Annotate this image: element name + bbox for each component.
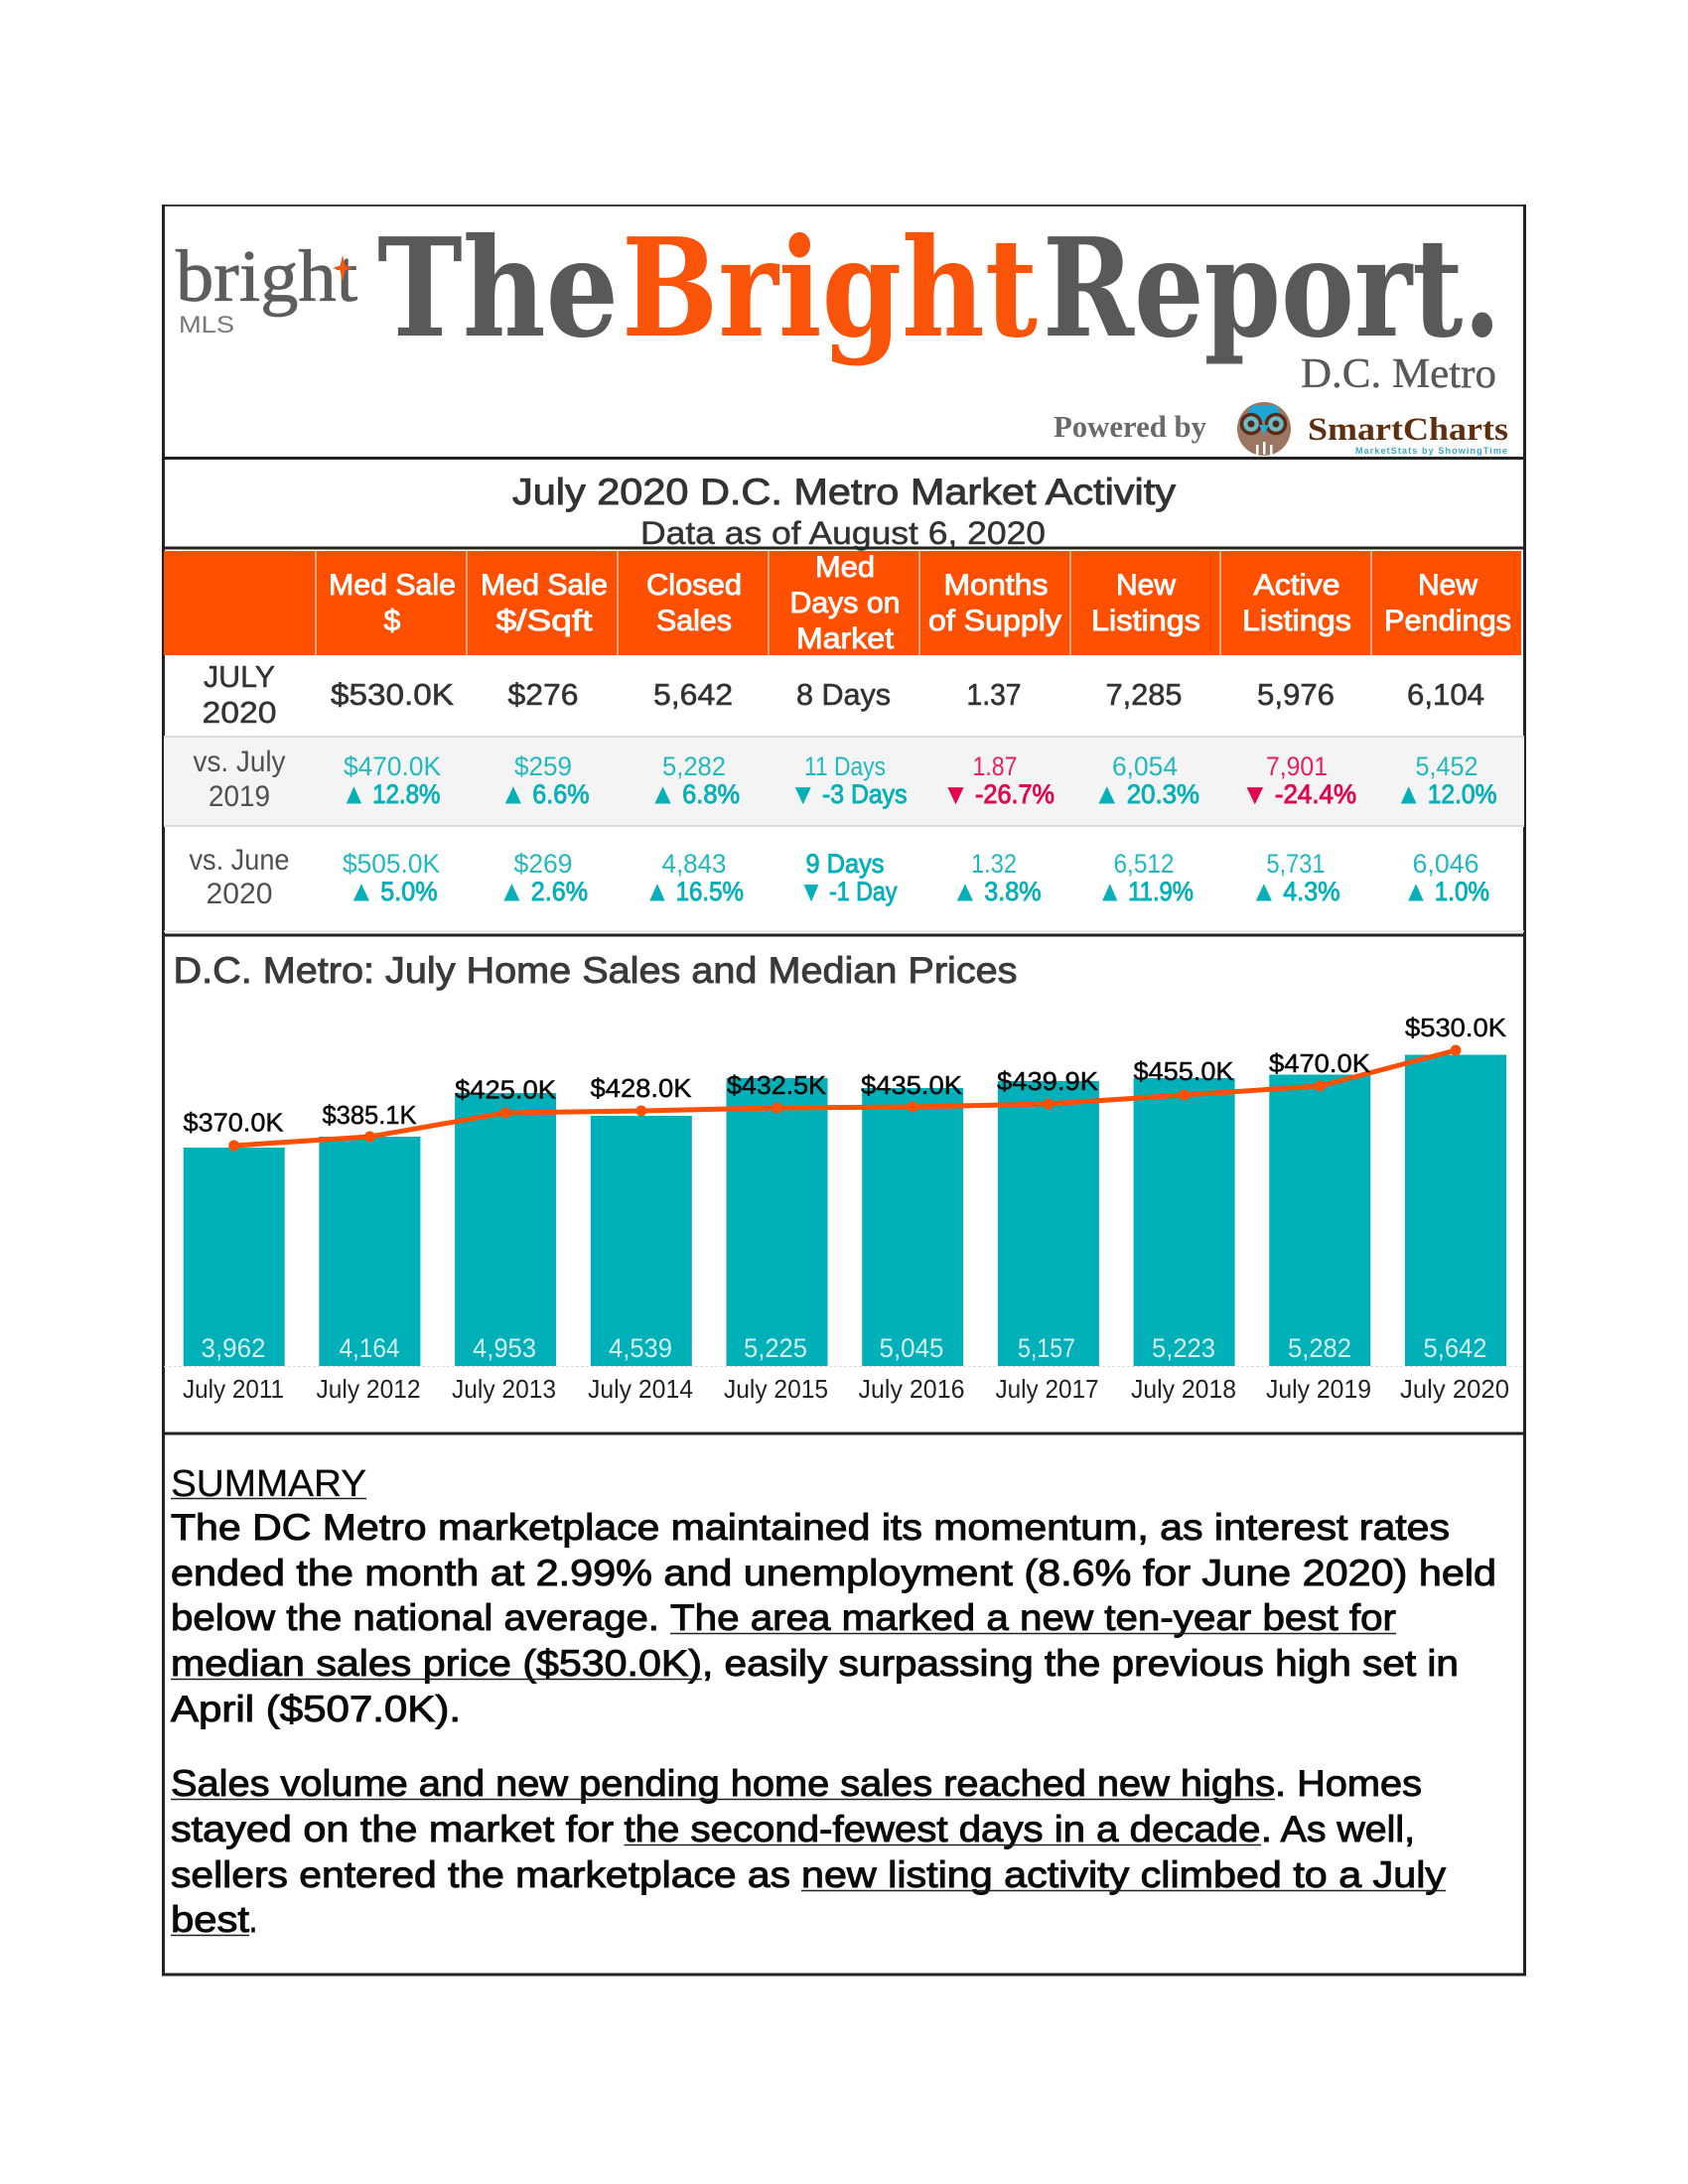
column header: Active Listings: Listings [1242, 605, 1351, 637]
row: vs. July 2019: $259 [514, 751, 572, 781]
column header: Med Days on Market [790, 551, 900, 655]
summary paragraph 1: April ($507.0K). [171, 1688, 461, 1729]
column header: Med Days on Market: Med [815, 551, 875, 584]
x-axis labels: July 2012 [316, 1374, 421, 1404]
column header: Closed Sales [646, 569, 742, 637]
panel: summary [171, 1463, 1496, 1940]
row: vs. July 2019: ▲ 12.8% [342, 779, 441, 809]
row: vs. July 2019: ▼ -26.7% [943, 779, 1055, 809]
column header: Med Sale $/Sqft [481, 569, 608, 637]
row: vs. June 2020: ▲ 16.5% [645, 877, 744, 906]
row: vs. June 2020 [164, 844, 1524, 931]
row: July 2020: 2020 [203, 695, 276, 730]
x-axis labels [183, 1374, 1509, 1404]
icon: SmartCharts owl [1237, 402, 1291, 456]
column header: Active Listings [1242, 569, 1351, 637]
row: vs. July 2019: ▲ 20.3% [1094, 779, 1199, 809]
column header: New Listings [1091, 569, 1200, 637]
row: vs. June 2020: ▲ 5.0% [350, 877, 437, 906]
summary paragraph 2: stayed on the market for [171, 1808, 614, 1849]
column header: Med Sale $/Sqft: Med Sale [481, 569, 608, 602]
row: vs. June 2020: ▲ 2.6% [499, 877, 588, 906]
price labels: $530.0K [1405, 1013, 1507, 1042]
row: July 2020: 1.37 [967, 677, 1021, 712]
row: vs. July 2019: 5,282 [662, 751, 726, 781]
panel: market activity table [164, 551, 1524, 931]
brand: SmartCharts: SmartCharts [1308, 412, 1508, 448]
price labels: $435.0K [861, 1070, 963, 1100]
summary paragraph 2: . Homes [1275, 1762, 1422, 1804]
summary paragraph 2: . [249, 1898, 257, 1940]
summary paragraph 1: ended the month at 2.99% and unemployment (8.6% for June 2020) held [171, 1552, 1496, 1593]
summary paragraph 1: The DC Metro marketplace maintained its momentum, as interest rates [171, 1506, 1450, 1548]
sales value labels: 4,539 [609, 1333, 672, 1363]
column header: Months of Supply: Months [943, 569, 1049, 602]
price labels: $425.0K [455, 1074, 557, 1104]
line: median sale price [228, 1044, 1462, 1152]
row: vs. July 2019 [164, 737, 1524, 826]
logo: bright MLS: bright [176, 236, 357, 318]
row: July 2020 [203, 659, 1484, 730]
column header: New Pendings: New [1418, 569, 1477, 602]
row: vs. July 2019: ▲ 12.0% [1396, 779, 1497, 809]
row: vs. July 2019: 7,901 [1266, 751, 1328, 781]
outer frame [162, 205, 1526, 1976]
row: vs. July 2019: 11 Days [804, 751, 886, 781]
x-axis labels: July 2016 [858, 1374, 965, 1404]
powered by label: Powered by [1054, 409, 1206, 444]
title logo: The Bright Report [377, 208, 1501, 368]
column header: Months of Supply: of Supply [928, 605, 1061, 637]
row: vs. July 2019: ▼ -3 Days [790, 779, 908, 809]
column header: Med Sale $: $ [384, 605, 401, 637]
row: vs. June 2020: ▼ -1 Day [800, 877, 898, 906]
x-axis labels: July 2011 [183, 1374, 284, 1404]
price labels: $428.0K [590, 1073, 692, 1103]
price labels: $439.9K [997, 1066, 1099, 1096]
sales value labels: 4,953 [473, 1333, 536, 1363]
row: vs. June 2020: 1.32 [971, 849, 1017, 879]
column header: New Pendings: Pendings [1384, 605, 1511, 637]
sales value labels [201, 1333, 1487, 1363]
sales value labels: 5,282 [1288, 1333, 1351, 1363]
summary paragraph 1 [171, 1506, 1496, 1729]
summary paragraph 2: new listing activity climbed to a July [801, 1853, 1446, 1895]
x-axis labels: July 2017 [995, 1374, 1098, 1404]
subheading: data date: Data as of August 6, 2020 [640, 515, 1046, 551]
table header band [164, 551, 1521, 655]
row: vs. June 2020: ▲ 4.3% [1251, 877, 1340, 906]
heading: market activity title: July 2020 D.C. Metro Market Activity [512, 472, 1177, 512]
row: July 2020: $530.0K [331, 677, 454, 712]
row: July 2020: 7,285 [1106, 677, 1182, 712]
title logo: The Bright Report: Bright [622, 208, 1038, 368]
price labels: $370.0K [183, 1108, 284, 1138]
logo: bright MLS: MLS [179, 312, 234, 339]
column header: Med Days on Market: Days on [790, 587, 900, 619]
row: July 2020: 8 Days [796, 677, 891, 712]
row: vs. June 2020: 6,512 [1114, 849, 1174, 879]
sales value labels: 3,962 [201, 1333, 266, 1363]
row: vs. July 2019: 2019 [209, 780, 270, 813]
column header: New Pendings [1384, 569, 1511, 637]
summary paragraph 2: best [171, 1898, 250, 1940]
sales value labels: 5,223 [1152, 1333, 1215, 1363]
panel: report header [176, 208, 1508, 456]
sales value labels: 5,045 [880, 1333, 943, 1363]
row: vs. July 2019: ▼ -24.4% [1242, 779, 1356, 809]
row: July 2020: JULY [204, 659, 275, 694]
sales value labels: 5,225 [744, 1333, 807, 1363]
row: vs. June 2020: $505.0K [343, 849, 440, 879]
price labels: $470.0K [1269, 1048, 1371, 1078]
row: July 2020: $276 [508, 677, 578, 712]
sales value labels: 4,164 [340, 1333, 399, 1363]
brand tagline: MarketStats by ShowingTime [1355, 446, 1507, 456]
price labels: $432.5K [727, 1070, 827, 1100]
panel: home sales and median prices chart [164, 950, 1524, 1404]
chart title: D.C. Metro: July Home Sales and Median Prices [173, 950, 1017, 991]
row: vs. June 2020: ▲ 3.8% [953, 877, 1041, 906]
x-axis labels: July 2015 [724, 1374, 828, 1404]
heading: market activity title [512, 472, 1177, 551]
row: vs. July 2019: 5,452 [1416, 751, 1477, 781]
summary heading: SUMMARY [171, 1463, 366, 1505]
summary paragraph 1: The area marked a new ten-year best for [670, 1596, 1396, 1638]
row: vs. June 2020: 9 Days [806, 849, 884, 879]
row: vs. July 2019: ▲ 6.6% [500, 779, 590, 809]
x-axis labels: July 2018 [1131, 1374, 1236, 1404]
row: July 2020: 6,104 [1407, 677, 1484, 712]
row: vs. June 2020: vs. June [189, 844, 290, 877]
summary paragraph 1: below the national average. [171, 1596, 659, 1638]
row: vs. July 2019: vs. July [193, 746, 286, 778]
row: vs. June 2020: ▲ 11.9% [1098, 877, 1194, 906]
column header: New Listings: Listings [1091, 605, 1200, 637]
price labels [183, 1013, 1507, 1138]
row: vs. June 2020: 6,046 [1412, 849, 1479, 879]
column header: Med Sale $: Med Sale [329, 569, 456, 602]
x-axis labels: July 2013 [452, 1374, 556, 1404]
summary paragraph 2: the second-fewest days in a decade [624, 1808, 1261, 1849]
title logo: The Bright Report: Report. [1043, 208, 1501, 368]
summary paragraph 2 [171, 1762, 1446, 1940]
column header: Med Days on Market: Market [796, 622, 895, 655]
bars: closed sales [184, 1054, 1506, 1366]
title logo: The Bright Report: The [377, 208, 619, 368]
column header: Months of Supply [928, 569, 1061, 637]
x-axis labels: July 2014 [588, 1374, 693, 1404]
row: vs. June 2020: $269 [514, 849, 572, 879]
column header: New Listings: New [1116, 569, 1176, 602]
row: vs. June 2020: 5,731 [1267, 849, 1325, 879]
row: vs. June 2020: ▲ 1.0% [1404, 877, 1489, 906]
column header: Active Listings: Active [1253, 569, 1340, 602]
summary paragraph 1: , easily surpassing the previous high set in [702, 1642, 1459, 1684]
column header: Closed Sales: Sales [656, 605, 732, 637]
summary paragraph 2: . As well, [1261, 1808, 1415, 1849]
region label: D.C. Metro: D.C. Metro [1301, 351, 1496, 397]
x-axis labels: July 2020 [1400, 1374, 1509, 1404]
row: vs. July 2019: 1.87 [973, 751, 1017, 781]
column header: Med Sale $/Sqft: $/Sqft [496, 605, 593, 637]
row: vs. July 2019: 6,054 [1112, 751, 1178, 781]
row: July 2020: 5,642 [653, 677, 733, 712]
row: vs. June 2020: 2020 [207, 878, 272, 910]
row: July 2020: 5,976 [1257, 677, 1335, 712]
sales value labels: 5,642 [1424, 1333, 1487, 1363]
summary paragraph 1: median sales price ($530.0K) [171, 1642, 702, 1684]
row: vs. July 2019: $470.0K [344, 751, 441, 781]
row: vs. June 2020: 4,843 [661, 849, 727, 879]
x-axis labels: July 2019 [1266, 1374, 1371, 1404]
row: vs. July 2019: ▲ 6.8% [650, 779, 740, 809]
price labels: $455.0K [1134, 1056, 1234, 1086]
column header: Closed Sales: Closed [646, 569, 742, 602]
sales value labels: 5,157 [1018, 1333, 1075, 1363]
column header: Med Sale $ [329, 569, 456, 637]
price labels: $385.1K [322, 1100, 417, 1130]
summary paragraph 2: sellers entered the marketplace as [171, 1853, 790, 1895]
summary paragraph 2: Sales volume and new pending home sales reached new highs [171, 1762, 1275, 1804]
